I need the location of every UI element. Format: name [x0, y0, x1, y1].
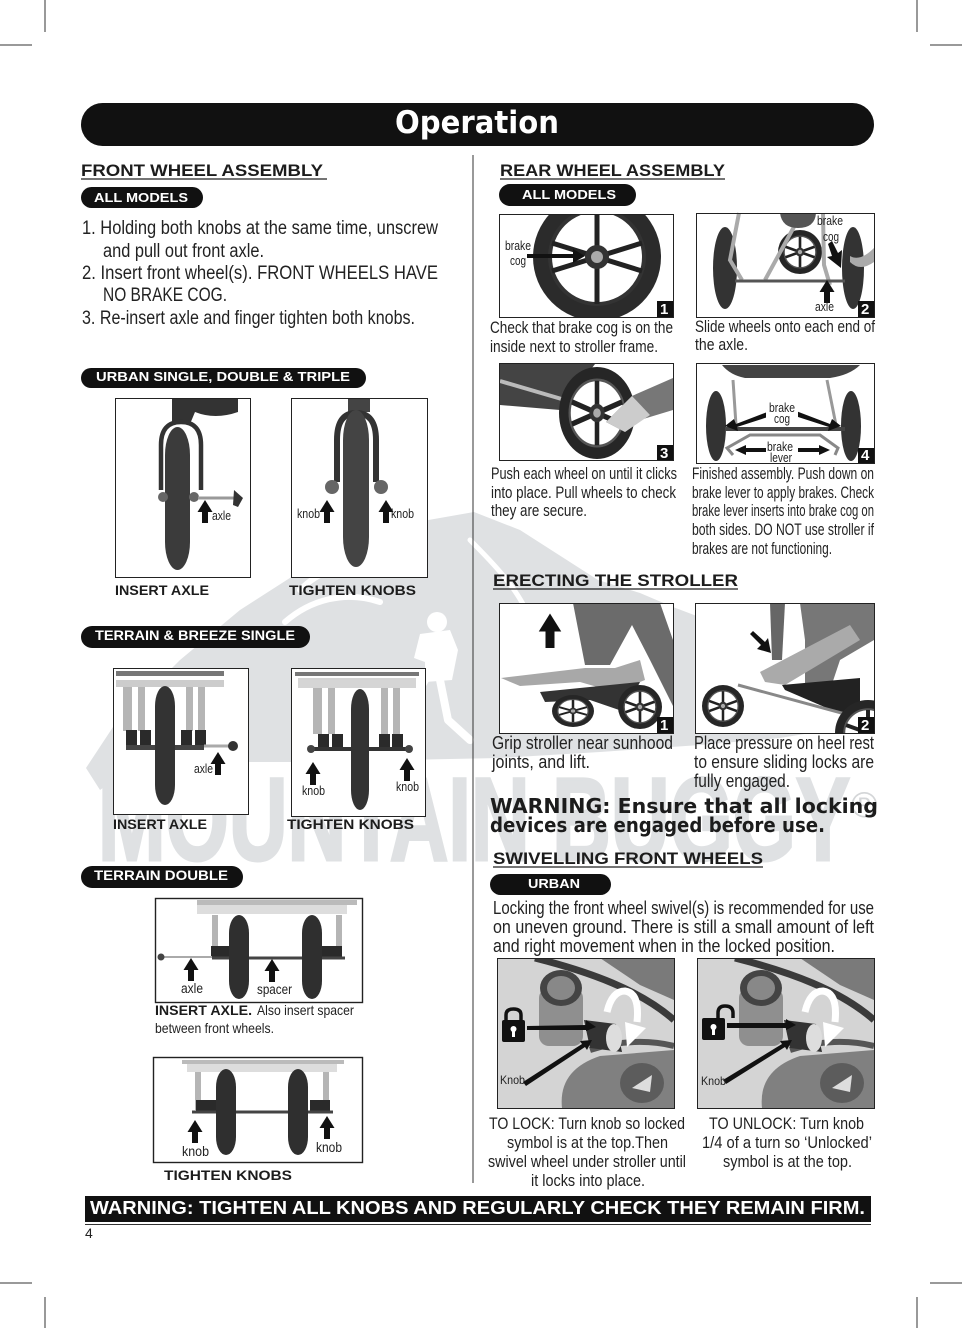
swivel description: and right movement when in the locked position.	[493, 936, 835, 956]
photo 2: slide wheels on axle: brake	[817, 214, 843, 228]
caption: finished assembly: Finished assembly. Push down on	[692, 464, 874, 483]
photo 2: slide wheels on axle: 2	[861, 301, 869, 318]
assembly steps	[82, 218, 438, 329]
photo: lock knob: Knob	[500, 1073, 525, 1087]
warning: locking devices: devices are engaged before use.	[490, 813, 825, 837]
photo: press heel rest	[695, 603, 901, 766]
panel: front wheel assembly	[81, 161, 438, 1183]
photo 3: push wheel on	[499, 363, 674, 462]
pill: all models rear: ALL MODELS	[522, 187, 616, 202]
photo 1: brake cog: cog	[510, 254, 526, 268]
photo: terrain tighten knobs	[291, 668, 426, 816]
caption: slide wheels: the axle.	[695, 335, 748, 354]
caption: push each wheel: into place. Pull wheels to check	[491, 483, 676, 502]
page number: 4	[85, 1225, 93, 1241]
caption: tighten knobs: TIGHTEN KNOBS	[289, 582, 416, 598]
caption: insert axle and spacer	[155, 1002, 354, 1036]
panel: rear wheel assembly	[490, 161, 875, 558]
caption: check brake cog: Check that brake cog is on the	[490, 318, 673, 337]
caption: place pressure: Place pressure on heel rest	[694, 732, 874, 753]
watermark: brand name: ®	[851, 784, 878, 825]
warning bar: WARNING: TIGHTEN ALL KNOBS AND REGULARLY CHECK THEY REMAIN FIRM.	[90, 1198, 865, 1218]
panel: erecting the stroller	[490, 571, 901, 837]
caption: finished assembly: brake lever inserts into brake cog on	[692, 501, 874, 520]
heading: erecting the stroller: ERECTING THE STROLLER	[493, 571, 738, 590]
swivel description: on uneven ground. There is still a small amount of left	[493, 917, 874, 937]
central divider	[472, 155, 474, 1183]
photo 1: brake cog: brake	[505, 239, 531, 253]
photo 4: finished assembly	[696, 363, 874, 465]
caption: finished assembly: both sides. DO NOT use stroller if	[692, 520, 874, 539]
photo 4: finished assembly: cog	[774, 412, 790, 426]
caption: slide wheels	[695, 317, 875, 354]
assembly steps: 3. Re-insert axle and finger tighten both knobs.	[82, 308, 415, 329]
photo 2: slide wheels on axle: cog	[823, 230, 839, 244]
caption: tighten knobs terrain: TIGHTEN KNOBS	[287, 816, 414, 832]
photo 4: finished assembly: brake	[767, 440, 793, 454]
caption: push each wheel	[491, 464, 677, 520]
pill: all models: ALL MODELS	[94, 190, 188, 205]
photo: terrain insert axle: axle	[194, 762, 213, 776]
caption: check brake cog	[490, 318, 673, 356]
caption: to lock: symbol is at the top.Then	[507, 1133, 668, 1152]
heading: swivelling front wheels: SWIVELLING FRONT WHEELS	[493, 849, 763, 868]
caption: push each wheel: Push each wheel on until it clicks	[491, 464, 677, 483]
photo: urban insert axle	[115, 398, 250, 578]
photo 3: push wheel on: 3	[660, 445, 668, 462]
pill: terrain double	[81, 866, 243, 888]
pill: urban	[490, 874, 611, 895]
assembly steps: NO BRAKE COG.	[103, 285, 227, 306]
photo 4: finished assembly: lever	[770, 451, 792, 465]
caption: grip stroller: Grip stroller near sunhood	[492, 732, 673, 753]
caption: insert axle terrain: INSERT AXLE	[113, 816, 207, 832]
photo: urban tighten knobs: knob	[391, 507, 414, 521]
photo 2: slide wheels on axle: axle	[815, 300, 834, 314]
photo 4: finished assembly: 4	[861, 447, 870, 464]
warning: locking devices: WARNING: Ensure that all locking	[490, 794, 878, 818]
swivel description	[493, 898, 874, 956]
photo: urban tighten knobs	[291, 398, 428, 578]
photo 4: finished assembly: brake	[769, 401, 795, 415]
photo: terrain insert axle	[113, 668, 248, 814]
caption: to lock: TO LOCK: Turn knob so locked	[489, 1114, 685, 1133]
caption: slide wheels: Slide wheels onto each end of	[695, 317, 875, 336]
assembly steps: 1. Holding both knobs at the same time, unscrew	[82, 218, 438, 239]
photo 1: brake cog: 1	[660, 301, 668, 318]
caption: to unlock: symbol is at the top.	[723, 1152, 852, 1171]
photo: unlock knob: Knob	[701, 1074, 726, 1088]
photo: terrain tighten knobs: knob	[396, 780, 419, 794]
photo: terrain double insert axle: spacer	[257, 982, 292, 997]
photo: terrain double tighten knobs: knob	[316, 1140, 342, 1155]
caption: finished assembly	[692, 464, 874, 558]
caption: finished assembly: brake lever to apply brakes. Check	[692, 483, 874, 502]
caption: place pressure: to ensure sliding locks are	[694, 751, 874, 772]
pill: urban single double triple: URBAN SINGLE, DOUBLE & TRIPLE	[96, 369, 350, 384]
caption: finished assembly: brakes are not functioning.	[692, 539, 832, 558]
pill: all models rear	[499, 184, 636, 206]
heading: rear wheel assembly: REAR WHEEL ASSEMBLY	[500, 161, 726, 180]
assembly steps: and pull out front axle.	[103, 241, 264, 262]
photo: terrain double tighten knobs: knob	[182, 1144, 209, 1159]
caption: insert axle and spacer: Also insert spacer	[257, 1002, 354, 1018]
caption: to lock	[488, 1114, 686, 1190]
caption: place pressure: fully engaged.	[694, 770, 790, 791]
photo: lock knob	[497, 958, 674, 1108]
caption: to lock: swivel wheel under stroller until	[488, 1152, 686, 1171]
pill: urban single double triple	[81, 368, 366, 388]
heading: front wheel assembly: FRONT WHEEL ASSEMBLY	[81, 161, 324, 180]
photo: terrain double insert axle: axle	[181, 981, 203, 996]
photo: lift stroller: 1	[660, 717, 668, 734]
photo: lift stroller	[499, 603, 674, 734]
pill: terrain double: TERRAIN DOUBLE	[94, 868, 228, 883]
caption: insert axle and spacer: INSERT AXLE.	[155, 1002, 252, 1018]
caption: place pressure	[694, 732, 874, 791]
photo: terrain double insert axle	[155, 898, 362, 1002]
watermark: mountain logo	[86, 512, 860, 790]
title bar: Operation	[395, 105, 559, 141]
pill: terrain and breeze single: TERRAIN & BREEZE SINGLE	[95, 628, 295, 643]
caption: to unlock: 1/4 of a turn so ‘Unlocked’	[702, 1133, 872, 1152]
caption: check brake cog: inside next to stroller frame.	[490, 337, 658, 356]
title bar	[81, 103, 874, 146]
photo 2: slide wheels on axle	[696, 213, 874, 318]
caption: to unlock	[702, 1114, 872, 1171]
photo: unlock knob	[697, 958, 874, 1108]
swivel description: Locking the front wheel swivel(s) is recommended for use	[493, 898, 874, 918]
caption: grip stroller	[491, 732, 673, 772]
photo: terrain double tighten knobs	[153, 1057, 362, 1162]
warning: locking devices	[490, 794, 878, 837]
caption: tighten knobs double: TIGHTEN KNOBS	[164, 1167, 292, 1183]
photo: terrain tighten knobs: knob	[302, 784, 325, 798]
panel: swivelling front wheels	[488, 849, 874, 1190]
photo: urban insert axle: axle	[212, 509, 231, 523]
caption: to lock: it locks into place.	[531, 1171, 645, 1190]
photo: press heel rest: 2	[861, 717, 869, 734]
caption: push each wheel: they are secure.	[491, 501, 587, 520]
photo: urban tighten knobs: knob	[297, 507, 320, 521]
pill: urban: URBAN	[528, 876, 580, 891]
pill: all models	[81, 187, 203, 208]
warning bar	[85, 1196, 871, 1222]
caption: grip stroller: joints, and lift.	[491, 751, 590, 772]
pill: terrain and breeze single	[81, 626, 310, 648]
assembly steps: 2. Insert front wheel(s). FRONT WHEELS HAVE	[82, 263, 438, 284]
caption: insert axle and spacer: between front wheels.	[155, 1020, 274, 1036]
caption: insert axle: INSERT AXLE	[115, 582, 209, 598]
runner silhouette	[414, 612, 458, 682]
caption: to unlock: TO UNLOCK: Turn knob	[709, 1114, 864, 1133]
photo 1: brake cog	[499, 193, 674, 321]
